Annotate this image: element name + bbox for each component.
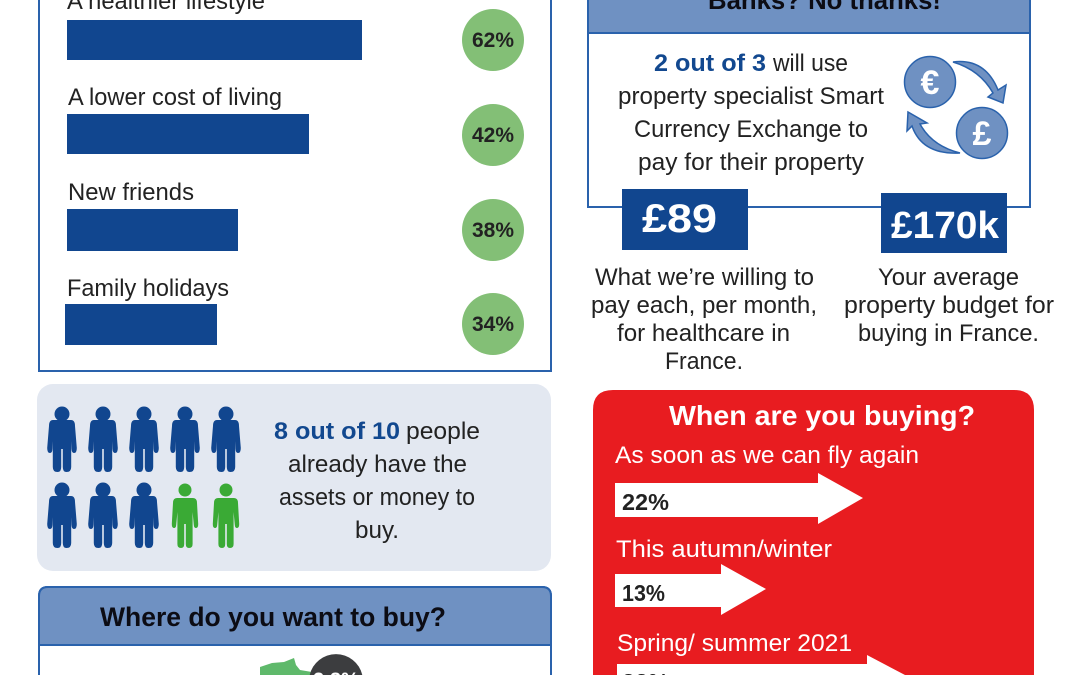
stat: 89 pounds: £89 [642, 197, 717, 241]
text: 8 out of 10: already have the [288, 451, 467, 478]
text: 8 out of 10 [274, 418, 480, 544]
label: new friends: New friends [68, 179, 194, 206]
badge: region percentage [310, 654, 362, 675]
icon: currency exchange: € [921, 64, 940, 102]
icon: currency exchange [904, 56, 1008, 158]
text: average property budget: property budget for [844, 292, 1054, 319]
stat: 170k pounds: £170k [891, 205, 1000, 247]
stat: 89 pounds [622, 189, 748, 250]
badge: 62%: 62% [472, 29, 514, 52]
icon: row of ten people [47, 406, 241, 548]
map: region of France [260, 658, 312, 675]
label: a lower cost of living: A lower cost of living [68, 84, 282, 111]
text: 2 out of 3: 2 out of 3 [654, 50, 766, 77]
arrow: 22%: 22% [622, 489, 669, 515]
label: family holidays: Family holidays [67, 275, 229, 302]
panel: when are you buying [593, 390, 1034, 675]
badge: 42% [462, 104, 524, 166]
heading: when are you buying: When are you buying? [669, 400, 975, 431]
text: healthcare payment [591, 264, 817, 375]
text: 8 out of 10: people [406, 418, 480, 445]
badge: 38%: 38% [472, 219, 514, 242]
arrow: 22% [615, 473, 863, 524]
badge: 34% [462, 293, 524, 355]
text: healthcare payment: France. [665, 348, 743, 375]
text: 8 out of 10: buy. [355, 517, 399, 544]
text: 8 out of 10: 8 out of 10 [274, 418, 400, 445]
text: 2 out of 3: Currency Exchange to [634, 116, 868, 143]
text: 2 out of 3: pay for their property [638, 149, 864, 176]
text: average property budget [844, 264, 1054, 347]
text: healthcare payment: What we’re willing to [595, 264, 814, 291]
panel: assets or money to buy [37, 384, 551, 571]
badge: 34%: 34% [472, 313, 514, 336]
arrow: 13% [615, 564, 766, 615]
panel: what you want from France [39, 0, 551, 371]
icon: currency exchange: £ [973, 115, 992, 153]
text: 2 out of 3 [618, 50, 884, 176]
heading: where do you want to buy: Where do you want to buy? [100, 602, 446, 632]
label: spring summer 2021: Spring/ summer 2021 [617, 630, 852, 657]
text: 2 out of 3: property specialist Smart [618, 83, 884, 110]
badge: 38% [462, 199, 524, 261]
bar: healthier lifestyle [67, 20, 362, 60]
bar: family holidays [65, 304, 217, 345]
arrow: 13%: 13% [622, 580, 665, 606]
badge: 42%: 42% [472, 124, 514, 147]
bar: lower cost of living [67, 114, 309, 154]
text: healthcare payment: pay each, per month, [591, 292, 817, 319]
label: as soon as we can fly again: As soon as we can fly again [615, 442, 919, 469]
arrow: spring summer 2021 [617, 655, 905, 675]
text: 2 out of 3: will use [772, 50, 848, 77]
text: average property budget: buying in France. [858, 320, 1039, 347]
bar: new friends [67, 209, 238, 251]
text: 8 out of 10: assets or money to [279, 484, 475, 511]
text: healthcare payment: for healthcare in [617, 320, 790, 347]
stat: 170k pounds [881, 193, 1007, 253]
text: average property budget: Your average [878, 264, 1019, 291]
badge: 62% [462, 9, 524, 71]
panel: banks no thanks [588, 0, 1030, 207]
label: this autumn/winter: This autumn/winter [616, 536, 832, 563]
panel: where do you want to buy [39, 587, 551, 675]
